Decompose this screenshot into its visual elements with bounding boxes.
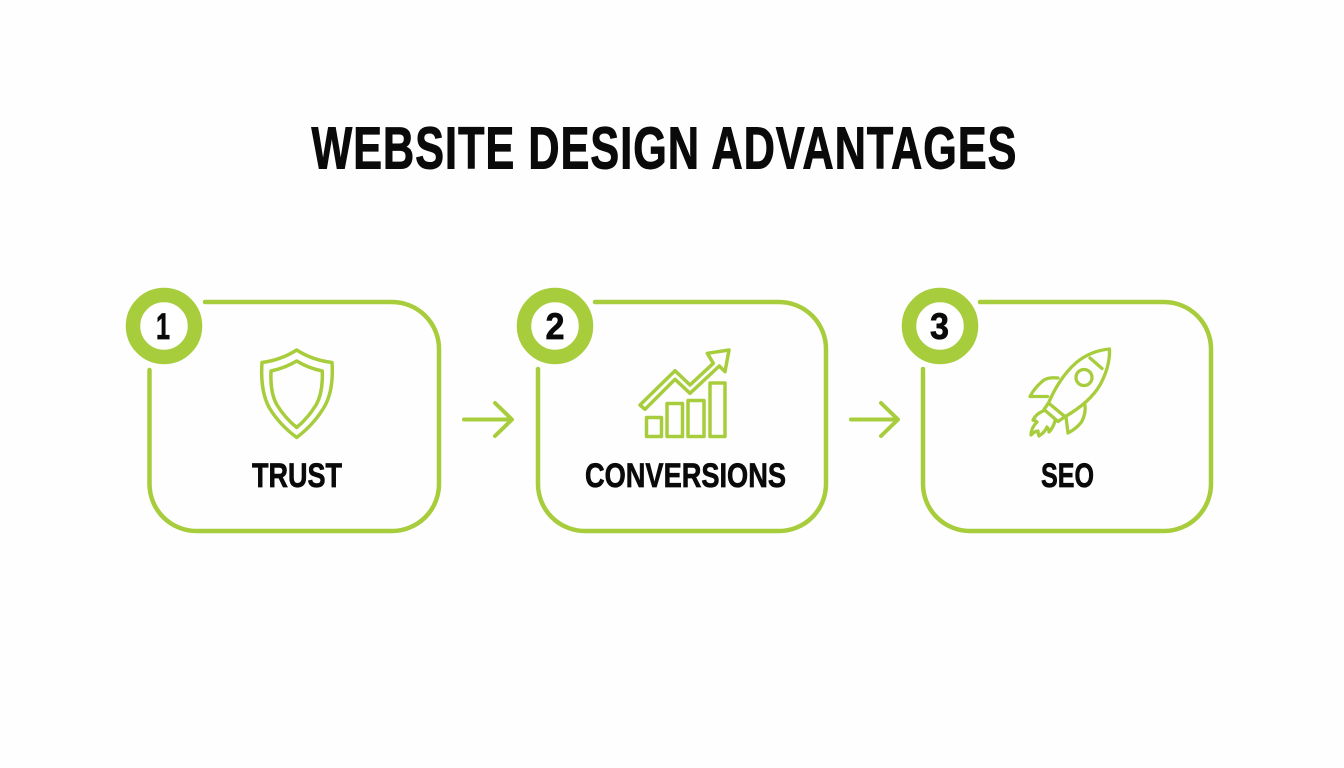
icon: growth chart [640, 350, 729, 436]
step badge 2 [524, 295, 586, 357]
step badge 1 [133, 295, 195, 357]
step badge 2: 2 [546, 306, 564, 347]
panel: seo [909, 295, 1211, 531]
step badge 3: 3 [930, 306, 949, 347]
label: conversions: CONVERSIONS [585, 457, 786, 495]
arrow: trust to conversions [464, 403, 512, 436]
icon: rocket [1030, 349, 1110, 436]
title: WEBSITE DESIGN ADVANTAGES [312, 116, 1018, 182]
panel: trust [133, 295, 439, 531]
panel: conversions [524, 295, 826, 531]
label: seo: SEO [1041, 457, 1094, 495]
arrow: conversions to seo [851, 403, 898, 436]
card outline: conversions [538, 302, 826, 531]
label: trust: TRUST [252, 457, 342, 495]
card outline: seo [923, 302, 1211, 531]
icon: shield [262, 350, 332, 438]
step badge 1: 1 [156, 306, 170, 347]
card outline: trust [150, 302, 439, 531]
step badge 3 [909, 295, 971, 357]
